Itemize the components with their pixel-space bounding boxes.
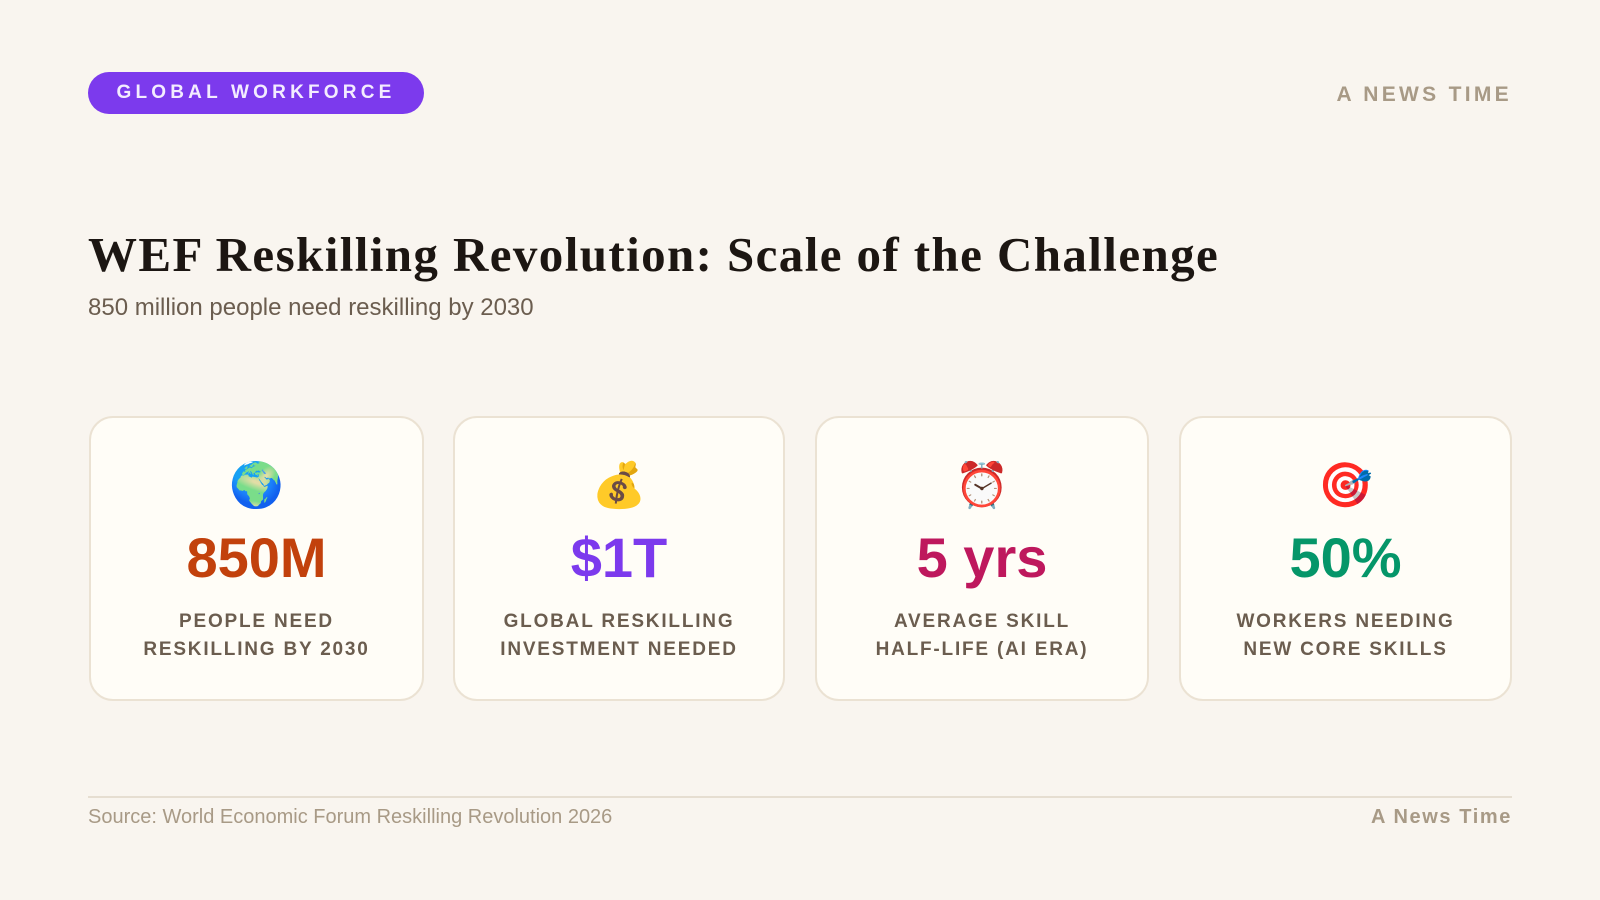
- label: [876, 611, 1088, 660]
- label: [500, 611, 738, 660]
- label: INVESTMENT NEEDED: [500, 639, 738, 660]
- card: people: [89, 416, 424, 701]
- card: core skills: [1179, 416, 1512, 701]
- stat: 850M: 850M: [186, 526, 327, 589]
- label: [1236, 611, 1455, 660]
- label: PEOPLE NEED: [179, 611, 334, 632]
- tag pill: [88, 72, 424, 114]
- stat: $1T: $1T: [571, 526, 667, 589]
- icon: money bag: 💰: [592, 459, 646, 511]
- label: GLOBAL RESKILLING: [504, 611, 734, 632]
- card: half-life: [815, 416, 1149, 701]
- icon: target: 🎯: [1318, 459, 1373, 511]
- icon: alarm clock: ⏰: [955, 459, 1009, 511]
- brand: A NEWS TIME: [1336, 83, 1512, 106]
- subtitle: 850 million people need reskilling by 2030: [88, 294, 534, 321]
- title: WEF Reskilling Revolution: Scale of the Challenge: [88, 227, 1219, 282]
- stat: 5 yrs: 5 yrs: [917, 526, 1047, 589]
- stat: 50%: 50%: [1289, 526, 1402, 589]
- label: AVERAGE SKILL: [894, 611, 1070, 632]
- label: RESKILLING BY 2030: [143, 639, 370, 660]
- label: NEW CORE SKILLS: [1243, 639, 1448, 660]
- label: [143, 611, 370, 660]
- card: investment: [453, 416, 785, 701]
- label: HALF-LIFE (AI ERA): [876, 639, 1088, 660]
- label: WORKERS NEEDING: [1236, 611, 1455, 632]
- footer brand: A News Time: [1371, 806, 1512, 828]
- source: Source: World Economic Forum Reskilling Revolution 2026: [88, 806, 612, 828]
- icon: globe: 🌍: [229, 459, 284, 511]
- tag pill: GLOBAL WORKFORCE: [116, 82, 396, 103]
